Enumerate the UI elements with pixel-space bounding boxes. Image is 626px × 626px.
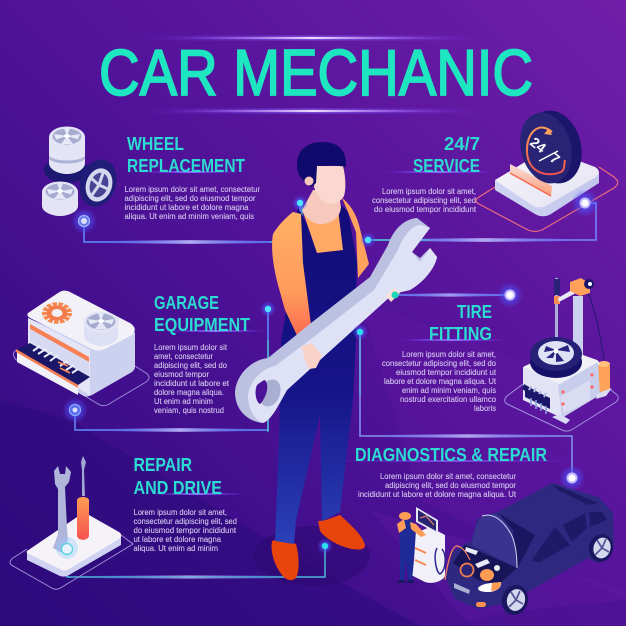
headlight bbox=[478, 582, 501, 592]
connector: diagnostics bbox=[360, 332, 572, 478]
text: 24/7 service: do eiusmod tempor incididunt bbox=[374, 204, 477, 214]
car body bbox=[447, 484, 613, 613]
icon: tools on pad bbox=[10, 456, 133, 589]
node: diagnostics start bbox=[559, 465, 585, 491]
neck bbox=[302, 190, 341, 224]
text: garage equipment: Lorem ipsum dolor sit bbox=[154, 342, 228, 352]
connector: repair and drive bbox=[67, 546, 325, 579]
node: garage start bbox=[62, 397, 88, 423]
text: garage equipment: amet, consectetur bbox=[154, 351, 213, 361]
text: 24/7 service: consectetur adipiscing elit, sed bbox=[372, 195, 476, 205]
text: tire fitting: consectetur adipiscing elit, sed do bbox=[382, 358, 496, 368]
node: figure collar bbox=[292, 195, 308, 211]
text: wheel replacement: incididunt ut labore et dolore magna bbox=[124, 202, 249, 212]
text: diagnostics and repair: Lorem ipsum dolor sit amet, consectetur bbox=[380, 471, 516, 481]
right shoe bbox=[318, 515, 365, 550]
text: tire fitting: enim ad minim veniam, quis bbox=[402, 385, 496, 395]
engine bay bbox=[453, 545, 517, 585]
icon: 24/7 clock on pad bbox=[476, 104, 618, 232]
heading: tire fitting bbox=[400, 302, 505, 344]
node: repair end bbox=[317, 538, 333, 554]
text: diagnostics and repair bbox=[358, 471, 517, 499]
connector: wheel replacement bbox=[84, 203, 302, 244]
text: repair and drive: do eiusmod tempor incididunt bbox=[134, 525, 237, 535]
hood bbox=[472, 514, 517, 568]
heading: 24/7 service bbox=[385, 134, 495, 176]
text: repair and drive: aliqua. Ut enim ad minim bbox=[134, 543, 218, 553]
icon: stacked wheels bbox=[42, 126, 123, 216]
heading: diagnostics and repair: DIAGNOSTICS & REPAIR bbox=[355, 445, 547, 465]
rear wheel bbox=[586, 531, 616, 565]
text: tire fitting: eiusmod tempor incididunt ut bbox=[396, 367, 497, 377]
diagnostic machine bbox=[411, 527, 445, 583]
text: diagnostics and repair: incididunt ut labore et dolore magna aliqua. Ut bbox=[358, 489, 517, 499]
right sleeve bbox=[342, 198, 369, 278]
text: repair and drive bbox=[134, 507, 237, 553]
monitor bbox=[416, 507, 438, 534]
heading: garage equipment: GARAGE bbox=[154, 293, 219, 313]
text: garage equipment: dolore magna aliqua. bbox=[154, 387, 224, 397]
text: tire fitting: labore et dolore magna aliqua. Ut bbox=[384, 376, 497, 386]
heading: repair and drive: REPAIR bbox=[134, 455, 192, 475]
shirt chest bbox=[303, 201, 343, 253]
jumper cables bbox=[445, 546, 470, 580]
car shadow bbox=[450, 600, 626, 626]
text: 24/7 service bbox=[372, 186, 477, 214]
node: figure shoulder bbox=[360, 232, 376, 248]
text: wheel replacement: Lorem ipsum dolor sit amet, consectetur bbox=[124, 184, 260, 194]
overalls and legs bbox=[275, 201, 357, 544]
heading: tire fitting: FITTING bbox=[429, 324, 492, 344]
icon: tire fitting machine bbox=[505, 278, 618, 431]
hand on head bbox=[386, 288, 400, 302]
left sleeve bbox=[272, 212, 312, 346]
node: repair start bbox=[56, 537, 78, 559]
number plate bbox=[454, 583, 470, 594]
connector: garage equipment bbox=[75, 309, 268, 432]
left shoe bbox=[272, 538, 299, 580]
text: repair and drive: Lorem ipsum dolor sit amet, bbox=[134, 507, 227, 517]
text: tire fitting: laboris bbox=[474, 403, 496, 413]
icon: 24/7 clock on pad: 7 bbox=[547, 150, 563, 167]
text: garage equipment bbox=[154, 342, 230, 415]
wrench bbox=[235, 218, 437, 423]
heading: wheel replacement bbox=[127, 134, 245, 176]
text: garage equipment: incididunt ut labore et bbox=[154, 378, 230, 388]
heading: repair and drive bbox=[134, 455, 245, 498]
figure shadow bbox=[254, 526, 370, 586]
node: garage end bbox=[260, 301, 276, 317]
icon: car with open hood bbox=[397, 484, 626, 626]
heading: garage equipment bbox=[154, 293, 265, 335]
text: tire fitting bbox=[382, 349, 497, 413]
hand on handle bbox=[302, 343, 322, 369]
mechanic figure bbox=[235, 142, 437, 580]
windows bbox=[532, 512, 607, 563]
hair bbox=[297, 142, 346, 187]
title with glow streaks: CAR MECHANIC bbox=[99, 36, 533, 109]
technician bbox=[399, 520, 416, 580]
text: 24/7 service: Lorem ipsum dolor sit amet, bbox=[382, 186, 476, 196]
head bbox=[314, 166, 345, 204]
heading: 24/7 service: SERVICE bbox=[413, 156, 480, 176]
heading: wheel replacement: WHEEL bbox=[127, 134, 184, 154]
node: 24/7 start bbox=[571, 189, 599, 217]
text: diagnostics and repair: adipiscing elit, sed do eiusmod tempor bbox=[385, 480, 516, 490]
heading: tire fitting: TIRE bbox=[457, 302, 492, 322]
text: tire fitting: Lorem ipsum dolor sit amet, bbox=[402, 349, 496, 359]
windshield bbox=[498, 513, 535, 567]
text: garage equipment: eiusmod tempor bbox=[154, 369, 209, 379]
text: repair and drive: ut labore et dolore magna bbox=[134, 534, 221, 544]
heading: garage equipment: EQUIPMENT bbox=[154, 315, 250, 335]
front wheel bbox=[499, 582, 531, 618]
text: garage equipment: adipiscing elit, sed do bbox=[154, 360, 227, 370]
heading: wheel replacement: REPLACEMENT bbox=[127, 156, 245, 176]
node: wheel replacement start bbox=[71, 208, 97, 234]
node: tire fitting start bbox=[392, 282, 523, 308]
sunroof bbox=[553, 484, 598, 505]
node: diagnostics end bbox=[352, 324, 368, 340]
text: repair and drive: consectetur adipiscing elit, sed bbox=[134, 516, 237, 526]
heading: 24/7 service: 24/7 bbox=[444, 134, 480, 154]
text: wheel replacement bbox=[124, 184, 260, 221]
text: wheel replacement: aliqua. Ut enim ad minim veniam, quis bbox=[124, 211, 254, 221]
text: tire fitting: nostrud exercitation ullamco bbox=[400, 394, 496, 404]
text: garage equipment: Ut enim ad minim bbox=[154, 396, 213, 406]
text: wheel replacement: adipiscing elit, sed do eiusmod tempor bbox=[124, 193, 256, 203]
icon: garage equipment box bbox=[14, 291, 149, 406]
heading: repair and drive: AND DRIVE bbox=[134, 478, 222, 498]
connector: 24/7 service bbox=[368, 203, 596, 242]
text: garage equipment: veniam, quis nostrud bbox=[154, 405, 224, 415]
icon: 24/7 clock on pad: 24 bbox=[527, 134, 549, 156]
